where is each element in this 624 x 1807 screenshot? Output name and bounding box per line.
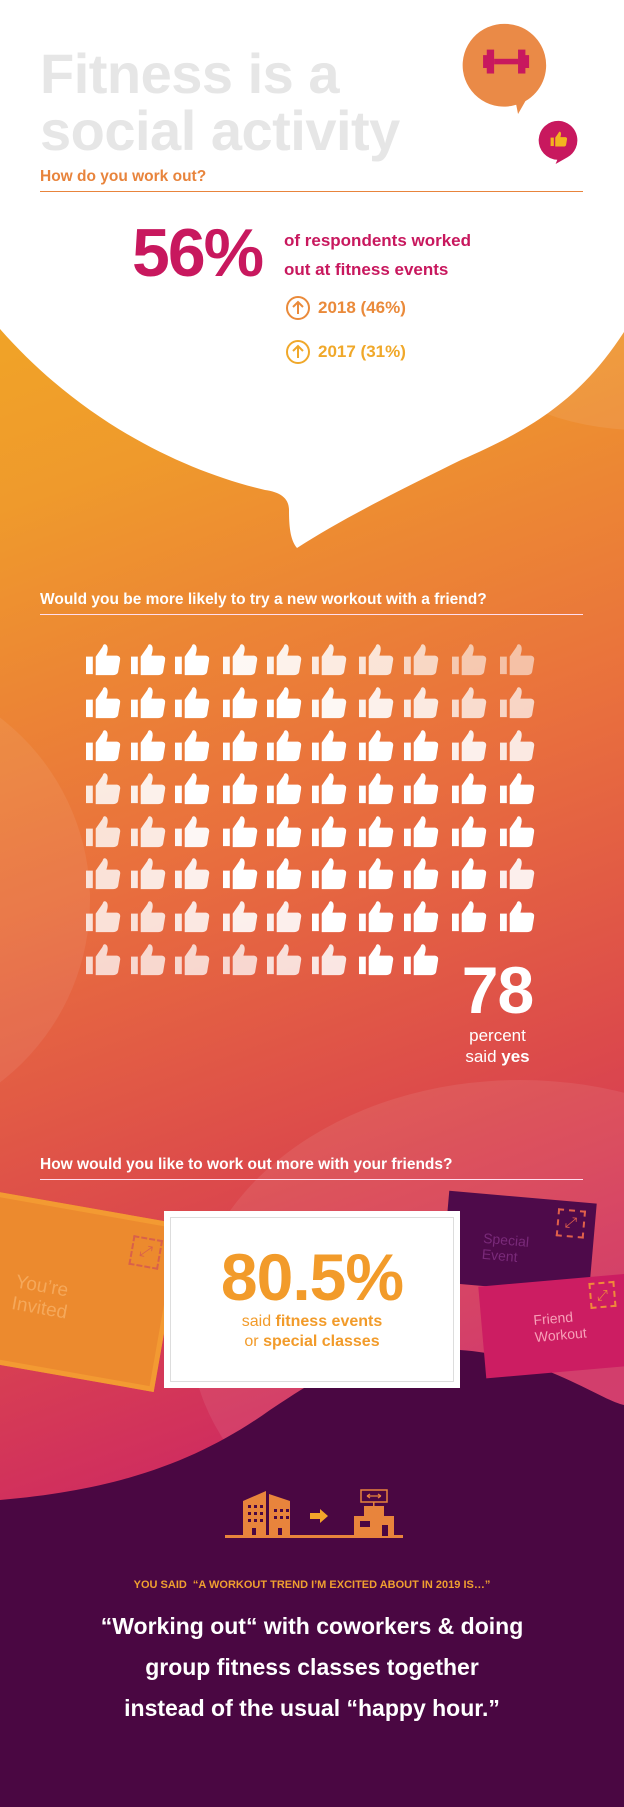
heading: new workout with friend: Would you be more likely to try a new workout with a friend?	[40, 591, 487, 608]
quote: “Working out“ with coworkers & doing	[101, 1613, 523, 1639]
callout box: 80.5%	[164, 1211, 460, 1388]
white speech area	[0, 0, 624, 548]
title	[40, 42, 400, 162]
stat text: out at fitness events	[284, 260, 448, 279]
heading: how do you work out: How do you work out?	[40, 168, 206, 185]
thumbs grid chart	[86, 644, 534, 976]
card: You're invited: ⤢	[138, 1242, 154, 1261]
purple bottom	[0, 1348, 624, 1807]
trend 2018	[286, 296, 406, 320]
card: Friend Workout: ⤢	[596, 1286, 609, 1303]
stat: 78 percent said yes: percent	[469, 1026, 526, 1045]
icon: office to gym	[225, 1489, 403, 1538]
card: Friend Workout	[478, 1274, 624, 1378]
icon: thumbs bubble	[538, 120, 578, 164]
card: You're invited: You’re	[14, 1271, 70, 1301]
stat: 78 percent said yes: 78	[462, 953, 533, 1027]
title: social activity	[40, 99, 400, 162]
card: Special Event: Special	[483, 1230, 530, 1250]
card: Friend Workout: Workout	[534, 1324, 587, 1345]
trend 2017	[286, 340, 406, 364]
card: Friend Workout: Friend	[533, 1309, 574, 1328]
trend 2018: 2018 (46%)	[318, 298, 406, 317]
title: Fitness is a	[40, 42, 339, 105]
icon: dumbbell bubble	[462, 24, 546, 114]
quote: instead of the usual “happy hour.”	[124, 1695, 500, 1721]
quote: group fitness classes together	[145, 1654, 479, 1680]
trend 2017: 2017 (31%)	[318, 342, 406, 361]
card: Special Event: ⤢	[564, 1214, 578, 1232]
card: Special Event: Event	[481, 1246, 518, 1265]
heading: new workout with friend	[40, 591, 583, 615]
stat: 78 percent said yes	[462, 953, 533, 1066]
callout box: 80.5%: or special classes	[244, 1333, 380, 1350]
heading: how do you work out	[40, 168, 583, 192]
heading: work out more with friends: How would you like to work out more with your friends?	[40, 1156, 452, 1173]
card: You're invited	[0, 1188, 183, 1392]
card: You're invited: Invited	[10, 1293, 69, 1324]
stat text: of respondents worked	[284, 231, 471, 250]
callout box: 80.5%: 80.5%	[221, 1240, 403, 1314]
quote	[101, 1613, 523, 1721]
callout box: 80.5%: said fitness events	[242, 1313, 382, 1330]
text: you said: YOU SAID “A WORKOUT TREND I’M EXCITED ABOUT IN 2019 IS…”	[134, 1579, 490, 1591]
stat: 78 percent said yes: said yes	[465, 1047, 530, 1066]
stat text	[284, 231, 471, 279]
card: Special Event	[441, 1191, 597, 1295]
stat: 56%: 56%	[132, 215, 262, 291]
heading: work out more with friends	[40, 1156, 583, 1180]
